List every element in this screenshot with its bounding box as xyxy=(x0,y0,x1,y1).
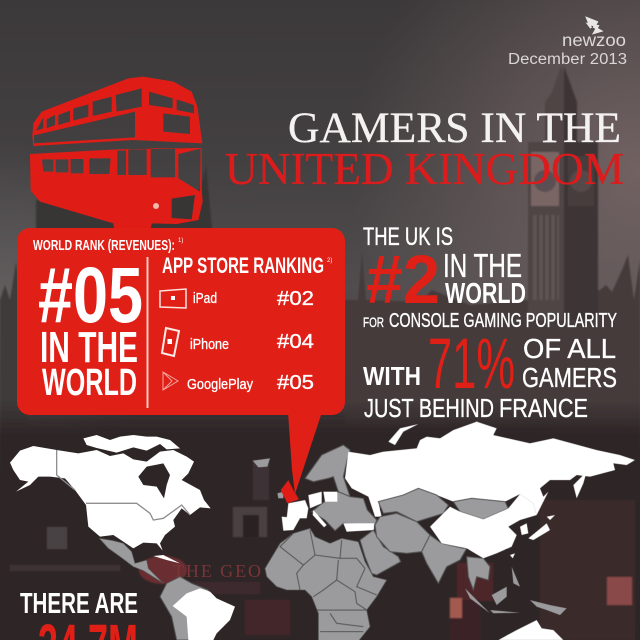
text block: UK console popularity xyxy=(363,223,617,423)
map: Southeast Asia islands xyxy=(465,567,567,615)
icon: newzoo mark xyxy=(587,18,601,33)
icon: phone xyxy=(162,328,179,356)
row: iPhone: #04 xyxy=(277,331,314,353)
map: South America xyxy=(160,577,235,640)
map: China xyxy=(430,494,537,558)
text: world rank label: WORLD RANK (REVENUES): xyxy=(33,238,175,254)
map: Arabia xyxy=(360,530,401,575)
text block: UK console popularity: FOR xyxy=(363,314,384,330)
text block: UK console popularity: OF ALL xyxy=(523,333,616,364)
map: Africa xyxy=(265,528,387,640)
row: Google Play xyxy=(163,372,314,394)
row: iPad xyxy=(160,288,314,310)
icon: tablet xyxy=(160,289,186,308)
icon: red double-decker bus xyxy=(30,77,203,233)
map: North America xyxy=(10,435,211,551)
row: Google Play: #05 xyxy=(277,372,314,394)
text: app store ranking heading: 2) xyxy=(327,258,332,264)
text: #05 in the world: #05 xyxy=(38,250,143,339)
row: iPhone xyxy=(162,328,314,356)
map: Iceland xyxy=(253,458,270,467)
background: pub sign lettering: THE GEO xyxy=(173,561,261,581)
logo: newzoo xyxy=(562,18,626,50)
text: app store ranking heading: APP STORE RANKING xyxy=(162,253,324,278)
text block: UK console popularity: FRANCE xyxy=(499,393,588,423)
text block: UK console popularity: JUST BEHIND xyxy=(364,393,494,423)
text block: UK console popularity: WORLD xyxy=(445,278,526,310)
date: December 2013 xyxy=(508,51,627,68)
world map xyxy=(10,422,635,640)
map: Scandinavia xyxy=(305,445,350,497)
title: GAMERS IN THE xyxy=(288,105,621,152)
map: Central America xyxy=(99,538,163,583)
text: #05 in the world: WORLD xyxy=(42,362,137,404)
row: iPad: #02 xyxy=(277,288,314,310)
map: eastern Europe xyxy=(312,492,377,531)
map: Cuba xyxy=(153,555,180,563)
map: Australia xyxy=(498,620,563,640)
map: United Kingdom highlight xyxy=(281,480,299,503)
text: #05 in the world xyxy=(38,250,143,404)
text block: UK console popularity: #2 xyxy=(366,241,440,318)
background: Parliament skyline xyxy=(345,252,640,425)
map: Europe, Africa and western Asia xyxy=(253,445,401,640)
icon: play triangle xyxy=(163,372,178,390)
text: #05 in the world: IN THE xyxy=(40,323,138,372)
map: Russia xyxy=(345,422,635,517)
map: Novaya Zemlya, Korea, Japan, Sakhalin xyxy=(388,424,587,558)
callout: UK pointer tail xyxy=(288,412,322,494)
row: Google Play: GooglePlay xyxy=(187,376,253,393)
map: Asia grey countries xyxy=(375,488,508,590)
text: there are 34.7M xyxy=(20,588,138,640)
text block: UK console popularity: WITH xyxy=(363,361,421,391)
row: iPad: iPad xyxy=(193,290,217,307)
map: Ireland xyxy=(277,492,283,498)
map: western Europe white countries xyxy=(282,492,374,532)
text block: UK console popularity: GAMERS xyxy=(522,362,617,393)
text: world rank label: 1) xyxy=(178,238,183,244)
title: UNITED KINGDOM xyxy=(225,144,624,194)
text block: UK console popularity: IN THE xyxy=(443,247,522,284)
title xyxy=(225,105,624,194)
text block: UK console popularity: THE UK IS xyxy=(363,223,453,251)
panel: world and app store rank xyxy=(17,228,345,415)
background: Big Ben tower xyxy=(528,66,598,320)
logo: newzoo: newzoo xyxy=(562,30,626,50)
text block: UK console popularity: 71% xyxy=(428,325,515,404)
row: iPhone: iPhone xyxy=(190,336,229,353)
background: pub facade at the bottom xyxy=(0,400,640,640)
